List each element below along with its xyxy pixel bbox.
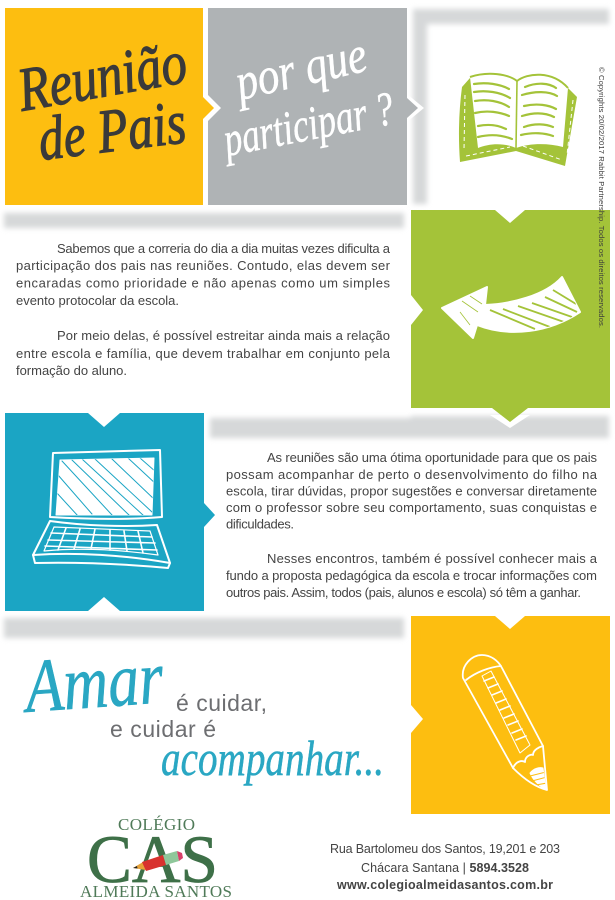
- contact info: Rua Bartolomeu dos Santos, 19,201 e 203: [330, 842, 560, 856]
- paragraph: benefits: possam acompanhar de perto o desenvolvimento do filho na: [226, 467, 598, 482]
- panel: yellow pencil: [411, 616, 610, 814]
- shadow bars: [4, 9, 609, 638]
- tagline: e cuidar é: [110, 716, 216, 742]
- subtitle: por que participar?: [217, 26, 398, 167]
- contact info: www.colegioalmeidasantos.com.br: [336, 878, 553, 892]
- paragraph: benefits: Nesses encontros, também é possível conhecer mais a: [267, 551, 598, 566]
- paragraph: intro: participação dos pais nas reuniões. Contudo, elas devem ser: [16, 258, 391, 273]
- contact info: Chácara Santana | 5894.3528: [361, 861, 529, 875]
- paragraph: intro: [16, 241, 391, 378]
- panel: yellow title: [5, 8, 203, 205]
- paragraph: intro: evento protocolar da escola.: [16, 293, 179, 308]
- tagline: [18, 636, 384, 786]
- panel: green arrow: [411, 210, 610, 428]
- title: Reunião de Pais: Reunião: [12, 28, 192, 125]
- paragraph: benefits: outros pais. Assim, todos (pais, alunos e escola) só têm a ganhar.: [226, 585, 581, 600]
- icon: pencil: [463, 655, 547, 790]
- paragraph: benefits: dificuldades.: [226, 516, 294, 532]
- paragraph: benefits: fundo a proposta pedagógica da escola e trocar informações com: [226, 568, 597, 583]
- tagline: acompanhar...: [161, 730, 384, 786]
- tagline: Amar: [18, 636, 166, 729]
- logo: Colégio CAS Almeida Santos: CAS: [87, 821, 218, 897]
- subtitle: por que participar?: participar ?: [217, 82, 398, 167]
- title: Reunião de Pais: de Pais: [34, 88, 190, 174]
- paragraph: benefits: As reuniões são uma ótima oportunidade para que os pais: [267, 450, 598, 465]
- logo: Colégio CAS Almeida Santos: COLÉGIO: [118, 815, 195, 834]
- panel: blue laptop: [5, 413, 215, 611]
- arrow: gray to book: [407, 94, 424, 122]
- paragraph: benefits: [226, 450, 598, 600]
- paragraph: intro: Sabemos que a correria do dia a dia muitas vezes dificulta a: [57, 241, 391, 256]
- paragraph: intro: Por meio delas, é possível estreitar ainda mais a relação: [57, 328, 390, 343]
- icon: curved arrow: [442, 277, 580, 338]
- title: Reunião de Pais: [12, 28, 192, 174]
- paragraph: intro: formação do aluno.: [16, 363, 127, 378]
- icon: book: [459, 74, 577, 166]
- paragraph: benefits: com o professor sobre seu comportamento, suas conquistas e: [226, 500, 597, 515]
- copyright note: © Copyrights 20/02/2017 Rabbit Partnership. Todos os direitos reservados.: [597, 67, 606, 328]
- tagline: é cuidar,: [176, 690, 267, 716]
- arrow: yellow to gray: [203, 94, 221, 122]
- contact info: [330, 842, 560, 892]
- icon: logo pencil: [133, 851, 183, 871]
- paragraph: intro: entre escola e família, que devem trabalhar em conjunto pela: [16, 346, 391, 361]
- panel: gray subtitle: [208, 8, 407, 205]
- icon: laptop: [33, 450, 170, 568]
- subtitle: por que participar?: por que: [227, 26, 372, 112]
- paragraph: benefits: escola, tirar dúvidas, propor sugestões e conversar diretamente: [226, 484, 597, 498]
- paragraph: intro: encaradas como prioridade e não apenas como um simples: [16, 276, 390, 290]
